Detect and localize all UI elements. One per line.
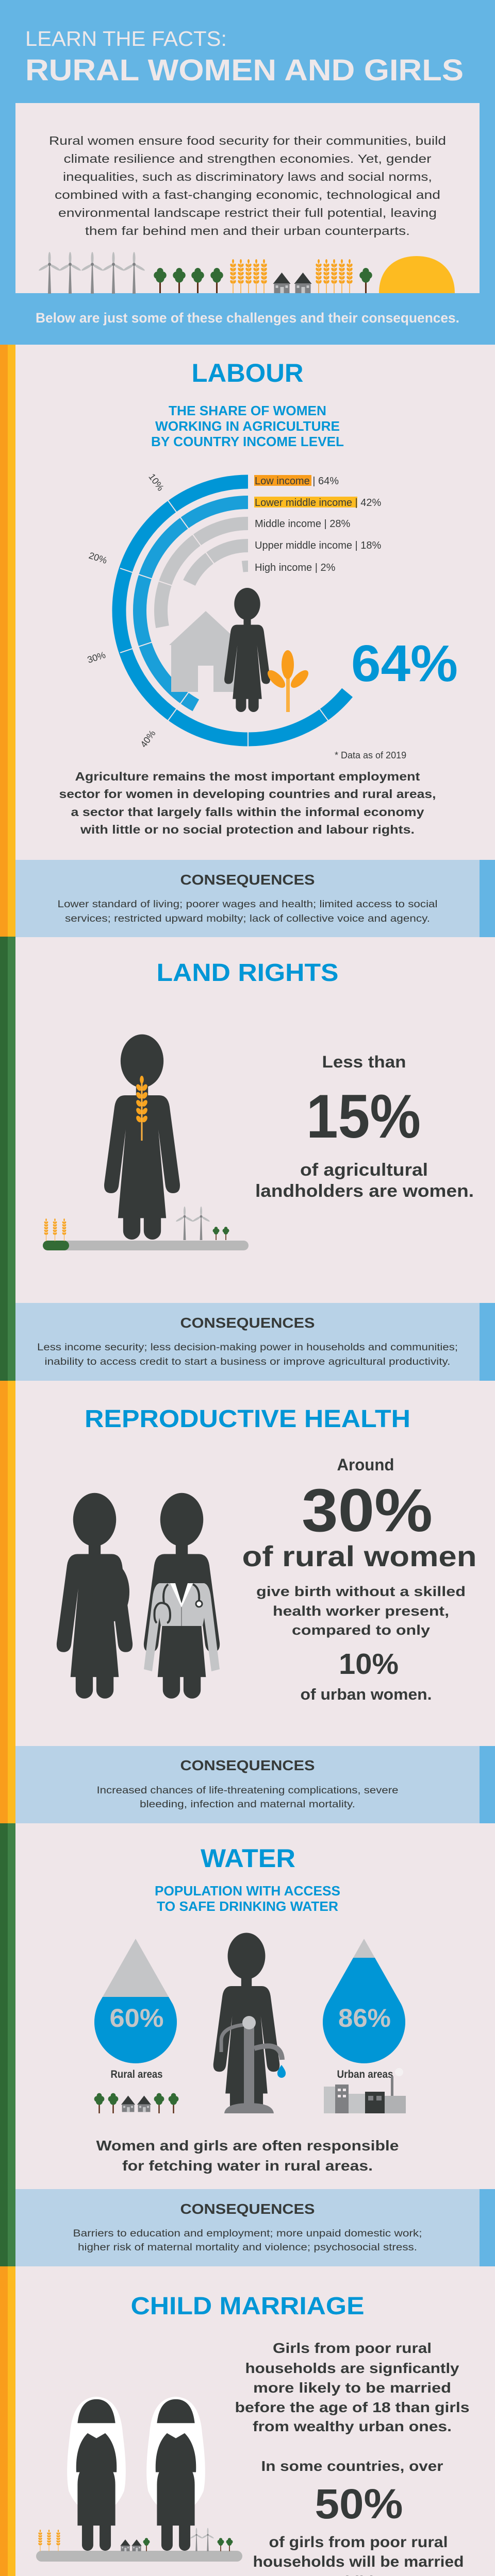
- side stripes: [0, 345, 15, 2576]
- icon: woman with wheat: [104, 1035, 180, 1240]
- intro text: environmental landscape restrict their full potential, leaving: [58, 206, 437, 219]
- text: agriculture statement: [59, 770, 436, 836]
- consequences: reproductive health: CONSEQUENCES: [180, 1757, 315, 1773]
- chart title: BY COUNTRY INCOME LEVEL: [151, 434, 344, 449]
- icon: health worker: [144, 1493, 220, 1699]
- stat: 30%: health worker present,: [273, 1603, 449, 1619]
- intro text: [49, 134, 446, 238]
- legend: Upper middle income | 18%: [255, 540, 382, 551]
- icon: city: [324, 2068, 406, 2113]
- stat: 30%: 30%: [302, 1477, 433, 1545]
- stat: 15%: of agricultural: [300, 1160, 428, 1180]
- icon: two girls: [67, 2397, 205, 2551]
- stat: 64%: 64%: [351, 635, 458, 692]
- consequences: water: Barriers to education and employment; more unpaid domestic work;: [73, 2228, 422, 2239]
- consequences: land rights: Less income security; less decision-making power in households and communities;: [37, 1342, 458, 1353]
- text: agriculture statement: a sector that largely falls within the informal economy: [71, 805, 424, 819]
- illustration: rural landscape: [38, 252, 455, 294]
- legend: Middle income | 28%: [255, 518, 351, 530]
- consequences: land rights: inability to access credit to start a business or improve agricultural productivity.: [44, 1357, 451, 1367]
- heading: reproductive health: REPRODUCTIVE HEALTH: [85, 1405, 410, 1433]
- chart title: THE SHARE OF WOMEN: [169, 403, 326, 418]
- intro text: inequalities, such as discriminatory laws and social norms,: [63, 170, 432, 183]
- icon: plant: [265, 650, 311, 712]
- heading: child marriage: CHILD MARRIAGE: [131, 2293, 364, 2320]
- drop: urban 86%: 86%: [338, 2004, 391, 2032]
- consequences: labour: [15, 860, 495, 937]
- panel: land rights: [43, 959, 474, 1250]
- scale labels: 10%: [146, 472, 166, 493]
- text: married before 18: [235, 2340, 469, 2434]
- scale labels: 30%: [86, 650, 107, 665]
- text: fetching water: [96, 2138, 399, 2174]
- legend: Low income | 64%: [255, 476, 339, 487]
- stat: 30%: of rural women: [242, 1540, 476, 1572]
- scale labels: [86, 472, 166, 749]
- header background: [0, 0, 495, 345]
- stat: 30%: [242, 1455, 476, 1703]
- consequences: water: [15, 2189, 495, 2266]
- stat: 50%: In some countries, over: [261, 2458, 443, 2474]
- drop: rural 60%: Rural areas: [110, 2069, 163, 2080]
- text: agriculture statement: with little or no social protection and labour rights.: [80, 823, 415, 836]
- consequences: water: CONSEQUENCES: [180, 2201, 315, 2217]
- icon: woman at tap: [213, 1933, 286, 2113]
- heading: land rights: LAND RIGHTS: [157, 959, 338, 987]
- chart title: [155, 1883, 340, 1914]
- heading: water: WATER: [201, 1844, 295, 1873]
- chart title: WORKING IN AGRICULTURE: [155, 418, 340, 434]
- panel: child marriage: [36, 2293, 469, 2576]
- stat: 15%: [255, 1053, 474, 1201]
- text: fetching water: Women and girls are often responsible: [96, 2138, 399, 2154]
- intro text: combined with a fast-changing economic, technological and: [55, 188, 440, 201]
- ground bar: [43, 1207, 249, 1250]
- legend: High income | 2%: [255, 562, 336, 573]
- consequences: reproductive health: [15, 1746, 495, 1823]
- chart title: POPULATION WITH ACCESS: [155, 1883, 340, 1899]
- drop: urban 86%: [323, 1939, 405, 2080]
- text: married before 18: before the age of 18 than girls: [235, 2399, 469, 2415]
- stat: 30%: Around: [337, 1455, 394, 1474]
- intro text: climate resilience and strengthen economies. Yet, gender: [64, 152, 432, 165]
- consequences: land rights: [15, 1303, 495, 1381]
- stat: 15%: Less than: [322, 1053, 406, 1071]
- intro text: them far behind men and their urban counterparts.: [85, 224, 410, 238]
- heading: labour: LABOUR: [192, 359, 303, 387]
- consequences: reproductive health: bleeding, infection and maternal mortality.: [140, 1799, 355, 1810]
- text: agriculture statement: sector for women in developing countries and rural areas,: [59, 787, 436, 801]
- consequences: land rights: CONSEQUENCES: [180, 1315, 315, 1331]
- title: learn the facts: LEARN THE FACTS:: [25, 27, 227, 50]
- icon: woman: [224, 588, 270, 712]
- icon: house: [169, 611, 242, 692]
- text: fetching water: for fetching water in rural areas.: [122, 2158, 373, 2174]
- intro text: Rural women ensure food security for their communities, build: [49, 134, 446, 147]
- stat: 30%: of urban women.: [300, 1685, 432, 1703]
- drop: rural 60%: [94, 1939, 177, 2080]
- panel: intro: [15, 103, 480, 294]
- stat: 30%: compared to only: [292, 1622, 430, 1638]
- panel: reproductive health: [57, 1405, 476, 1703]
- stat: 50%: households will be married: [253, 2553, 464, 2570]
- stat: 15%: 15%: [306, 1082, 421, 1151]
- subheading: challenges: Below are just some of these challenges and their consequences.: [36, 310, 459, 326]
- radial bar chart: [119, 482, 348, 747]
- panel: water: [94, 1844, 406, 2174]
- scale labels: 20%: [88, 550, 108, 566]
- icon: rural village: [94, 2093, 178, 2113]
- stat: 30%: 10%: [339, 1648, 399, 1681]
- stat: 15%: landholders are women.: [255, 1181, 474, 1201]
- consequences: water: higher risk of maternal mortality and violence; psychosocial stress.: [78, 2242, 417, 2253]
- consequences: labour: Lower standard of living; poorer wages and health; limited access to social: [58, 899, 438, 910]
- stat: 30%: give birth without a skilled: [256, 1584, 466, 1599]
- drop: urban 86%: Urban areas: [337, 2069, 393, 2080]
- note: data year: * Data as of 2019: [335, 750, 406, 760]
- icon: pregnant woman: [57, 1493, 133, 1699]
- ground bar: [36, 2528, 242, 2562]
- text: married before 18: households are signficantly: [245, 2360, 459, 2376]
- legend: [254, 475, 382, 573]
- chart title: TO SAFE DRINKING WATER: [157, 1899, 338, 1914]
- consequences: labour: CONSEQUENCES: [180, 872, 315, 888]
- legend: Lower middle income | 42%: [255, 497, 382, 509]
- drop: rural 60%: 60%: [109, 2004, 164, 2032]
- text: married before 18: more likely to be married: [253, 2380, 451, 2396]
- stat: 50%: of girls from poor rural: [269, 2534, 448, 2551]
- text: married before 18: from wealthy urban ones.: [253, 2418, 452, 2434]
- scale labels: 40%: [138, 728, 158, 749]
- text: agriculture statement: Agriculture remains the most important employment: [75, 770, 420, 783]
- consequences: reproductive health: Increased chances of life-threatening complications, severe: [97, 1785, 398, 1796]
- stat: 50%: [253, 2458, 464, 2576]
- chart title: [151, 403, 344, 449]
- text: married before 18: Girls from poor rural: [273, 2340, 432, 2356]
- consequences: labour: services; restricted upward mobilty; lack of collective voice and agency.: [65, 913, 430, 924]
- stat: 50%: 50%: [315, 2481, 403, 2528]
- title: rural women and girls: RURAL WOMEN AND GIRLS: [25, 54, 464, 87]
- panel: labour: [59, 359, 458, 836]
